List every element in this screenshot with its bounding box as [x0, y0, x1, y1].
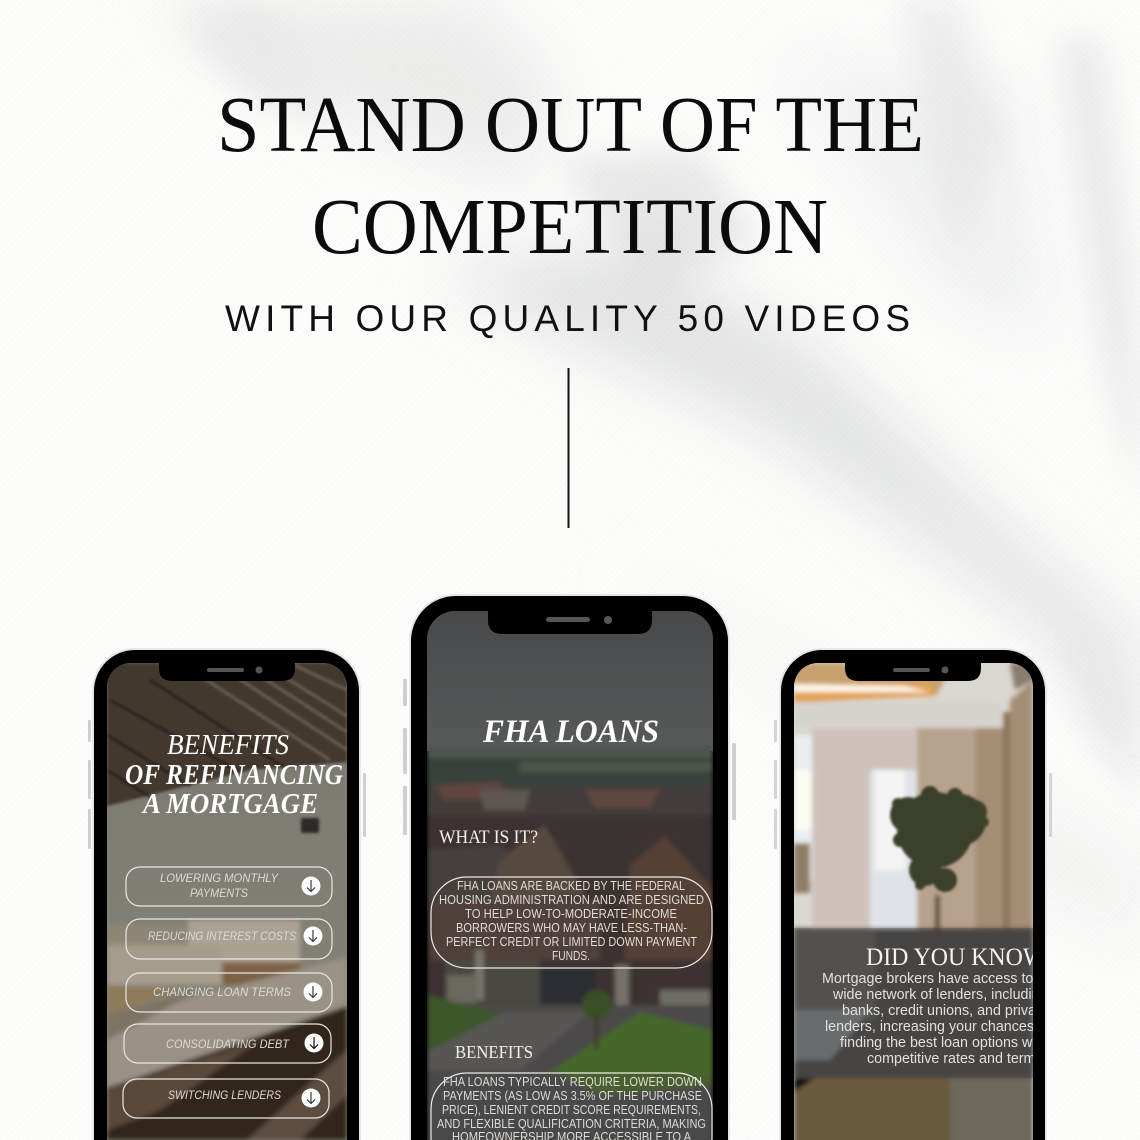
- pill: lowering monthly payments: PAYMENTS: [190, 886, 248, 900]
- panel: did you know overlay: [794, 928, 1056, 1078]
- pill: switching lenders: [123, 1079, 329, 1118]
- pill: changing loan terms: CHANGING LOAN TERMS: [153, 985, 291, 999]
- pill: benefits description: PRICE), LENIENT CREDIT SCORE REQUIREMENTS,: [442, 1103, 701, 1117]
- body text: mortgage brokers: [822, 971, 1050, 1067]
- heading: FHA loans: FHA LOANS: [482, 714, 659, 750]
- pill: benefits description: [431, 1073, 712, 1140]
- heading: BENEFITS: [167, 730, 289, 761]
- pill: changing loan terms: [126, 973, 332, 1012]
- pill: what is it description: TO HELP LOW-TO-MODERATE-INCOME: [465, 907, 677, 921]
- heading: did you know: DID YOU KNOW?: [866, 944, 1056, 971]
- title: STAND OUT OF THE: [217, 82, 924, 169]
- pill: reducing interest costs: REDUCING INTEREST COSTS: [148, 929, 296, 943]
- pill: benefits description: FHA LOANS TYPICALLY REQUIRE LOWER DOWN: [443, 1075, 702, 1089]
- phone: did you know: [774, 649, 1056, 1140]
- title: COMPETITION: [312, 184, 828, 271]
- phone: benefits of refinancing: [88, 649, 366, 1140]
- pill: what is it description: FHA LOANS ARE BACKED BY THE FEDERAL: [457, 879, 685, 893]
- side buttons: [88, 720, 366, 849]
- notch: [159, 663, 295, 681]
- pill: lowering monthly payments: [126, 867, 332, 906]
- pill: reducing interest costs: [126, 919, 332, 959]
- screen photo: interior with plant: [794, 663, 1033, 1140]
- pill: lowering monthly payments: LOWERING MONTHLY: [160, 871, 279, 885]
- pill: benefits description: PAYMENTS (AS LOW AS 3.5% OF THE PURCHASE: [443, 1089, 702, 1103]
- title: [217, 82, 924, 271]
- side buttons: [774, 720, 1052, 849]
- heading: OF REFINANCING: [125, 760, 343, 791]
- pill: what is it description: [431, 877, 712, 968]
- phone body: [410, 595, 729, 1140]
- heading: benefits: BENEFITS: [455, 1042, 533, 1062]
- screen photo: suburban house: [427, 611, 713, 1140]
- heading: what is it: WHAT IS IT?: [439, 827, 538, 848]
- vertical divider line: [568, 368, 570, 528]
- body text: mortgage brokers: banks, credit unions, and private: [842, 1003, 1048, 1019]
- subtitle: WITH OUR QUALITY 50 VIDEOS: [225, 298, 910, 339]
- body text: mortgage brokers: competitive rates and terms.: [867, 1051, 1047, 1067]
- pill: benefits description: AND FLEXIBLE QUALIFICATION CRITERIA, MAKING: [437, 1117, 706, 1131]
- screen photo: living room: [107, 663, 347, 1140]
- phone: FHA loans: [403, 595, 736, 1140]
- notch: [488, 611, 652, 634]
- heading: [125, 730, 343, 820]
- pill: what is it description: FUNDS.: [552, 949, 590, 963]
- body text: mortgage brokers: Mortgage brokers have access to a: [822, 971, 1045, 987]
- pill: consolidating debt: [124, 1024, 331, 1063]
- phone body: [93, 649, 360, 1140]
- side buttons: [403, 679, 736, 835]
- body text: mortgage brokers: lenders, increasing your chances of: [825, 1019, 1050, 1035]
- body text: mortgage brokers: finding the best loan options with: [840, 1035, 1047, 1051]
- pill: what is it description: HOUSING ADMINISTRATION AND ARE DESIGNED: [439, 893, 704, 907]
- notch: [845, 663, 981, 681]
- heading: A MORTGAGE: [141, 789, 318, 820]
- pill: what is it description: BORROWERS WHO MAY HAVE LESS-THAN-: [456, 921, 687, 935]
- phone body: [780, 649, 1046, 1140]
- plant foliage: [890, 786, 989, 892]
- body text: mortgage brokers: wide network of lenders, including: [832, 987, 1048, 1003]
- pill: what is it description: PERFECT CREDIT OR LIMITED DOWN PAYMENT: [446, 935, 697, 949]
- pill: consolidating debt: CONSOLIDATING DEBT: [166, 1037, 291, 1051]
- pill: switching lenders: SWITCHING LENDERS: [168, 1088, 281, 1102]
